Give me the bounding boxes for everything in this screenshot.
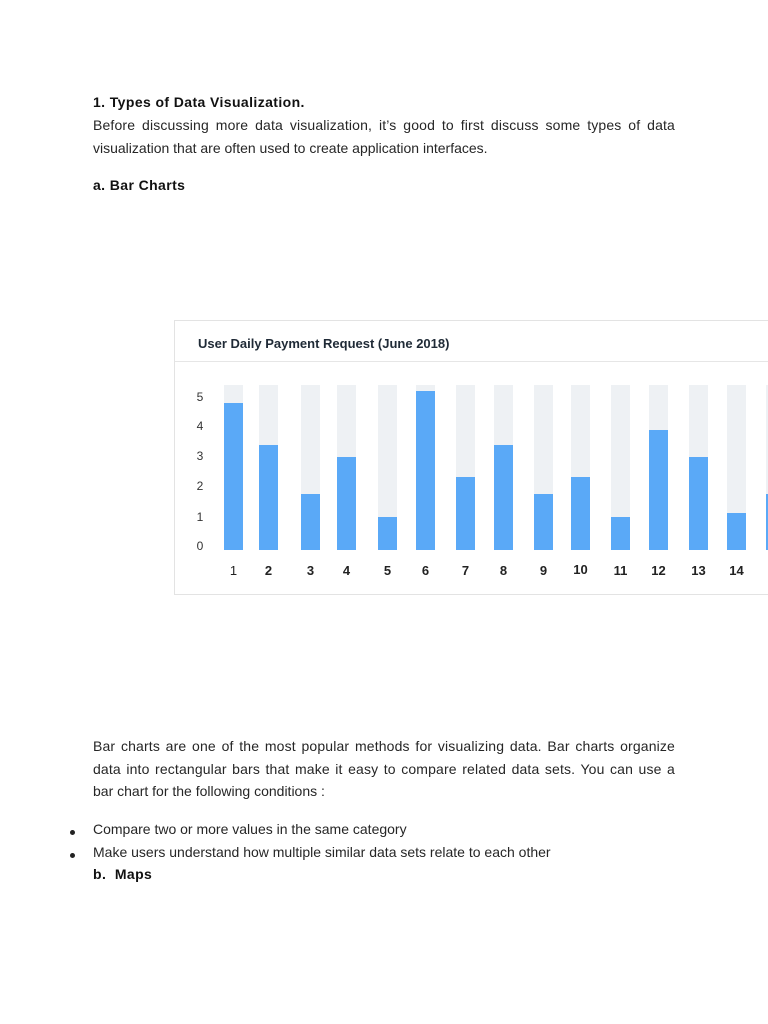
bar charts paragraph: data into rectangular bars that make it easy to compare related data sets. You can use a — [93, 760, 675, 776]
bullet list: Make users understand how multiple similar data sets relate to each other — [93, 844, 551, 860]
bar charts paragraph — [93, 738, 675, 799]
bar chart: 5 — [197, 390, 204, 404]
bar charts paragraph: bar chart for the following conditions : — [93, 783, 325, 799]
bar chart: 13 — [691, 563, 706, 578]
intro paragraph — [93, 117, 675, 156]
bar chart: 10 — [573, 562, 588, 577]
bar chart: 9 — [540, 563, 547, 578]
bar chart: 7 — [462, 563, 469, 578]
bar chart: 12 — [651, 563, 666, 578]
bar chart: 3 — [307, 563, 314, 578]
subheading: bar charts: a. Bar Charts — [93, 177, 185, 193]
bar chart: 6 — [422, 563, 429, 578]
bar chart: 2 — [197, 479, 204, 493]
bar chart: 8 — [500, 563, 507, 578]
bar chart: 2 — [265, 563, 272, 578]
bar chart: 4 — [343, 563, 351, 578]
bar chart: 1 — [197, 510, 204, 524]
bar chart: 3 — [197, 449, 204, 463]
subheading: maps: b. Maps — [93, 866, 152, 882]
bar charts paragraph: Bar charts are one of the most popular methods for visualizing data. Bar charts organize — [93, 738, 675, 754]
chart title: User Daily Payment Request (June 2018) — [198, 336, 449, 351]
bar chart: 4 — [197, 419, 204, 433]
intro paragraph: visualization that are often used to create application interfaces. — [93, 140, 488, 156]
heading: types of data visualization: 1. Types of Data Visualization. — [93, 94, 305, 110]
bullet list: Compare two or more values in the same category — [93, 821, 407, 837]
bar chart: 14 — [729, 563, 744, 578]
intro paragraph: Before discussing more data visualization, it’s good to first discuss some types of data — [93, 117, 675, 133]
bar chart: 0 — [197, 539, 204, 553]
bullet list — [70, 821, 551, 860]
bar chart: 11 — [614, 563, 627, 578]
bar chart: 5 — [384, 563, 391, 578]
bar chart card — [174, 320, 768, 595]
bar chart: 1 — [230, 563, 237, 578]
